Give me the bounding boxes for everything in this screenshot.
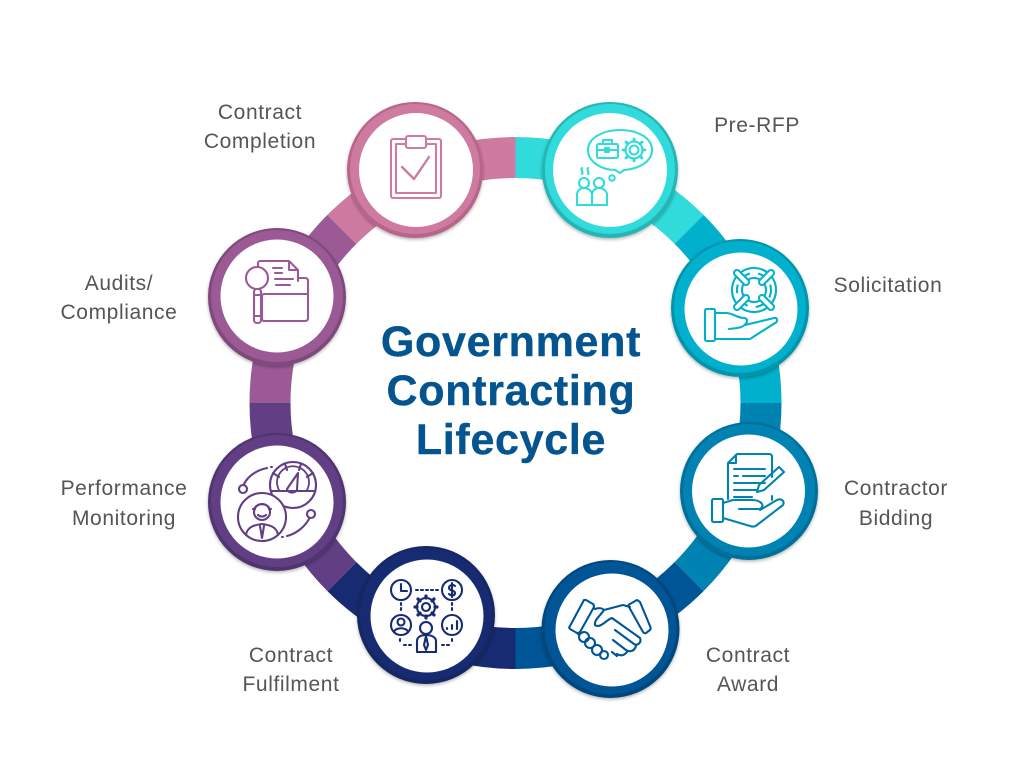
icon: management gears and person (391, 580, 462, 652)
label: Contractor Bidding: Bidding (859, 507, 933, 530)
label: Contract Fulfilment: Contract (249, 644, 333, 667)
label: Contract Fulfilment: Fulfilment (242, 673, 340, 696)
label: Audits/Compliance: Audits/ (85, 272, 153, 295)
node: Solicitation (671, 239, 809, 377)
node: Contract Fulfilment (357, 546, 495, 684)
label: Pre-RFP: Pre-RFP (714, 114, 800, 137)
node: Audits/Compliance (208, 228, 346, 366)
icon: people with speech bubble (577, 130, 652, 205)
node: Pre-RFP (542, 102, 678, 238)
node: Performance Monitoring (208, 433, 346, 571)
label: Contract Completion: Completion (204, 130, 316, 153)
label: Performance Monitoring: Performance (61, 477, 187, 500)
title: Contracting (387, 367, 635, 415)
label: Performance Monitoring: Monitoring (72, 507, 176, 530)
label: Performance Monitoring (61, 477, 187, 530)
ring: lifecycle segments (270, 158, 761, 648)
icon: handshake (569, 600, 651, 659)
label: Contract Award: Award (717, 673, 779, 696)
node: Contractor Bidding (680, 422, 818, 560)
label: Contract Fulfilment (242, 644, 340, 696)
label: Audits/Compliance (61, 272, 177, 324)
icon: hand with document and pen (712, 454, 784, 527)
label: Contract Award (706, 644, 790, 696)
label: Contract Award: Contract (706, 644, 790, 667)
node: Contract Award (542, 560, 680, 698)
label: Contract Completion: Contract (218, 101, 302, 124)
title: Government (381, 318, 641, 366)
label: Contract Completion (204, 101, 316, 153)
icon: hand with lifebuoy (705, 268, 777, 341)
label: Solicitation: Solicitation (834, 274, 942, 297)
label: Audits/Compliance: Compliance (61, 301, 177, 324)
icon: gauge and person (238, 462, 316, 541)
node: Contract Completion (347, 102, 483, 238)
icon: clipboard with check (391, 136, 441, 198)
label: Contractor Bidding (844, 477, 948, 530)
title: Lifecycle (416, 416, 606, 464)
title (381, 318, 641, 464)
icon: magnifier, document and folder (246, 261, 308, 323)
label: Contractor Bidding: Contractor (844, 477, 948, 500)
